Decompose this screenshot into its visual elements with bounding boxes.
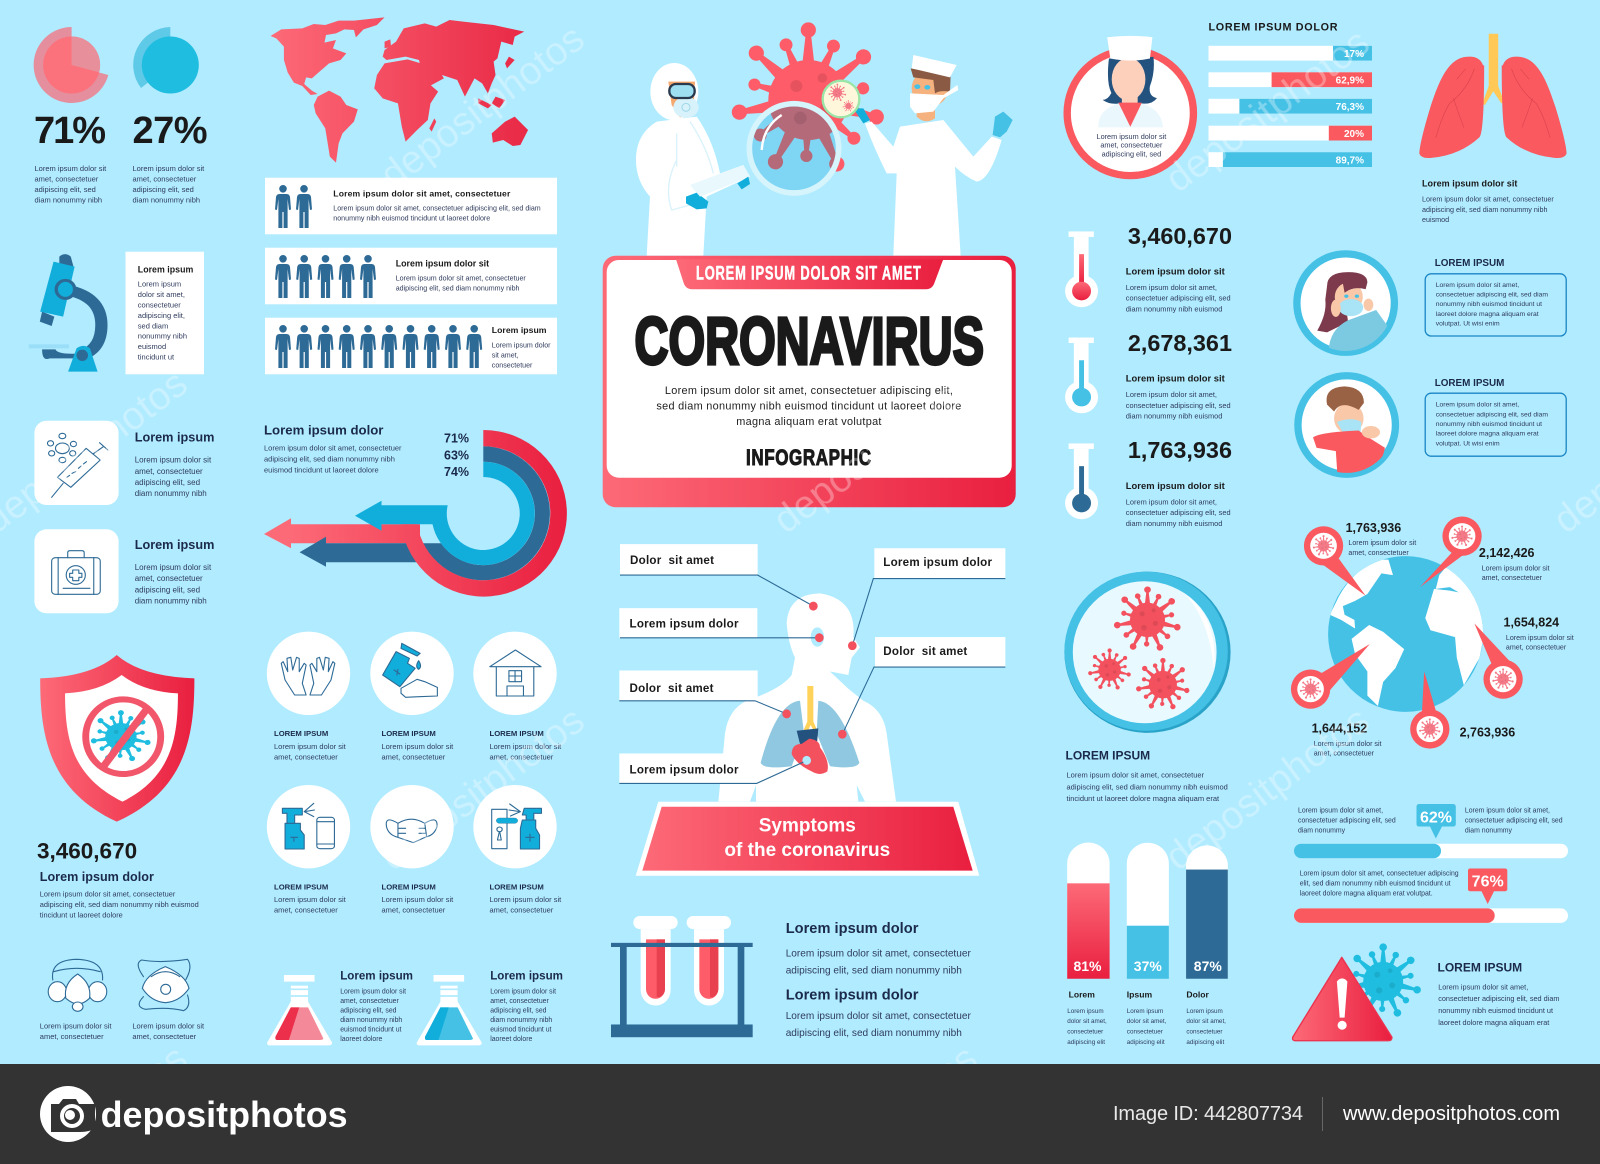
- caption row 2: amet, consectetuer: [274, 906, 338, 915]
- progress bar 76%: elit, sed diam nonummy nibh euismod tincidunt ut: [1300, 881, 1451, 888]
- flask: red: amet, consectetuer: [340, 998, 400, 1005]
- pie stat: 71%: 71%: [34, 110, 106, 152]
- arrow chart: adipiscing elit, sed diam nonummy nibh: [264, 454, 395, 464]
- test tube text: Lorem ipsum dolor sit amet, consectetuer: [786, 1011, 971, 1022]
- thermometer stat 2: 2,678,361: [1128, 330, 1232, 356]
- card: first aid kit: adipiscing elit, sed: [135, 585, 200, 594]
- panel: microscope text: nonummy nibh: [138, 332, 187, 341]
- symptoms banner: Symptoms: [759, 816, 856, 837]
- capsule bar chart: Ipsum: [1127, 990, 1152, 1000]
- caption row 2: Lorem ipsum dolor sit: [490, 895, 562, 904]
- card: vaccine syringe: amet, consectetuer: [135, 467, 203, 476]
- text box 1: Lorem ipsum dolor sit amet,: [1436, 282, 1519, 289]
- people panel: 5 people: Lorem ipsum dolor sit amet, consectetuer: [396, 275, 526, 283]
- card: first aid kit: amet, consectetuer: [135, 574, 203, 583]
- caption row 1: LOREM IPSUM: [490, 729, 544, 738]
- pie stat: 27%: diam nonummy nibh: [132, 196, 200, 204]
- caption row 1: amet, consectetuer: [490, 752, 554, 761]
- doctor in lab coat: [853, 55, 1013, 256]
- panel: microscope text: [126, 252, 204, 374]
- thermometer stat 2: Lorem ipsum dolor sit amet,: [1126, 390, 1217, 399]
- dark arrow and ring: [300, 446, 550, 580]
- bar chart: lorem ipsum dolor: [1208, 21, 1372, 167]
- capsule bar chart: dolor sit amet,: [1186, 1018, 1226, 1025]
- panel: microscope text: sed diam: [138, 321, 168, 330]
- ribbon: [676, 259, 943, 289]
- text box 2: volutpat. Ut wisi enim: [1436, 440, 1500, 447]
- nurse portrait: Lorem ipsum dolor sit: [1097, 132, 1166, 141]
- warning sign with virus: Lorem ipsum dolor sit amet,: [1438, 982, 1528, 991]
- petri dish with viruses: [1064, 572, 1231, 803]
- capsule bar chart: Lorem: [1069, 990, 1095, 1000]
- icon: lungs: Lorem ipsum dolor sit: [1422, 178, 1517, 188]
- arrow chart: [264, 422, 567, 597]
- flask: blue: amet, consectetuer: [490, 998, 550, 1005]
- nurse portrait: amet, consectetuer: [1100, 141, 1163, 150]
- text box 1: LOREM IPSUM: [1435, 258, 1504, 269]
- icon: lungs: [1419, 34, 1567, 224]
- pie stat: 27%: Lorem ipsum dolor sit: [132, 164, 205, 173]
- thermometer stat 2: consectetuer adipiscing elit, sed: [1126, 401, 1231, 410]
- symptom labels: Lorem ipsum dolor: [630, 763, 739, 776]
- scientist in hazmat suit: [636, 63, 750, 256]
- nurse portrait: adipiscing elit, sed: [1102, 150, 1161, 159]
- test tubes: [611, 916, 753, 1037]
- icon: spray on phone: [267, 785, 350, 868]
- petri dish with viruses: adipiscing elit, sed diam nonummy nibh euismod: [1066, 782, 1228, 791]
- card: first aid kit: [34, 529, 214, 613]
- test tube text: adipiscing elit, sed diam nonummy nibh: [786, 966, 962, 976]
- test tube text: Lorem ipsum dolor: [786, 921, 919, 937]
- icon: shield with crossed virus: [40, 655, 194, 822]
- shield stat text: Lorem ipsum dolor: [40, 870, 154, 884]
- icons: respirator masks with text: Lorem ipsum dolor sit: [132, 1022, 205, 1031]
- subtitle: INFOGRAPHIC: [746, 445, 872, 470]
- caption row 2: amet, consectetuer: [490, 906, 554, 915]
- symptoms banner: [636, 802, 979, 876]
- symptoms diagram: [619, 544, 1005, 876]
- panel: microscope text: euismod: [138, 342, 166, 351]
- watermark: depositphotos: [373, 699, 592, 879]
- petri dish with viruses: LOREM IPSUM: [1066, 748, 1150, 762]
- panel: microscope text: Lorem ipsum: [138, 280, 181, 289]
- caption row 2: Lorem ipsum dolor sit: [274, 895, 347, 904]
- progress bar 76%: Lorem ipsum dolor sit amet, consectetuer adipiscing: [1300, 871, 1459, 878]
- globe with pins: Lorem ipsum dolor sit: [1482, 564, 1550, 572]
- globe with pins: 1,763,936: [1346, 521, 1401, 535]
- arrow chart: euismod tincidunt ut laoreet dolore: [264, 465, 379, 474]
- thermometer stat 1: Lorem ipsum dolor sit amet,: [1126, 283, 1217, 292]
- petri dish with viruses: Lorem ipsum dolor sit amet, consectetuer: [1066, 771, 1205, 780]
- magnifying glass: [690, 100, 842, 197]
- caption row 1: LOREM IPSUM: [382, 729, 436, 738]
- petri sample lens: [823, 81, 859, 117]
- capsule bar chart: Dolor: [1186, 990, 1209, 1000]
- capsule bar chart: dolor sit amet,: [1127, 1018, 1167, 1025]
- globe with pins: Lorem ipsum dolor sit: [1348, 539, 1416, 547]
- icon: camera logo: [40, 1086, 96, 1142]
- ribbon: LOREM IPSUM DOLOR SIT AMET: [696, 263, 922, 284]
- people panel: 5 people: [265, 248, 557, 304]
- icon: lungs: euismod: [1422, 215, 1449, 224]
- text box 1: volutpat. Ut wisi enim: [1436, 320, 1500, 328]
- thermometer stat 1: consectetuer adipiscing elit, sed: [1126, 294, 1231, 303]
- symptom labels: Lorem ipsum dolor: [883, 556, 992, 569]
- pie stat: 27%: amet, consectetuer: [132, 174, 197, 184]
- symptom labels: [619, 544, 1005, 783]
- flask: blue: laoreet dolore: [490, 1036, 533, 1043]
- arrow chart: 71%: [444, 432, 469, 446]
- text box 1: consectetuer adipiscing elit, sed diam: [1436, 292, 1548, 299]
- thermometer stat 1: 3,460,670: [1128, 223, 1232, 249]
- red arrow shaft: [264, 518, 420, 548]
- thermometer stat 3: diam nonummy nibh euismod: [1126, 519, 1222, 528]
- bar chart: lorem ipsum dolor: LOREM IPSUM DOLOR: [1208, 21, 1338, 33]
- people panel: 10 people: consectetuer: [492, 362, 533, 370]
- people panel: 10 people: Lorem ipsum dolor: [492, 342, 551, 350]
- people panel: 10 people: sit amet,: [492, 352, 519, 360]
- flask: blue: Lorem ipsum: [490, 969, 563, 982]
- arrow chart: 63%: [444, 448, 469, 462]
- flask: red: Lorem ipsum dolor sit: [340, 988, 406, 995]
- shield stat text: tincidunt ut laoreet dolore: [40, 911, 123, 920]
- icons: respirator masks with text: [40, 959, 205, 1041]
- watermark: depositphotos: [373, 17, 592, 197]
- globe with pins: 2,763,936: [1460, 725, 1515, 739]
- text box 2: nonummy nibh euismod tincidunt ut: [1436, 421, 1542, 428]
- card: first aid kit: Lorem ipsum: [135, 538, 214, 552]
- globe with pins: amet, consectetuer: [1314, 750, 1375, 758]
- caption row 2: LOREM IPSUM: [382, 882, 436, 891]
- pie stat: 71%: Lorem ipsum dolor sit: [34, 164, 107, 173]
- globe with pins: 1,654,824: [1504, 616, 1559, 630]
- portrait: man coughing into elbow: [1298, 376, 1395, 477]
- pie stat: 71%: diam nonummy nibh: [34, 196, 102, 204]
- thermometer stat 1: Lorem ipsum dolor sit: [1126, 266, 1225, 276]
- shield stat text: [37, 838, 199, 920]
- capsule bar chart: Lorem ipsum: [1127, 1008, 1163, 1015]
- thermometer stat 2: diam nonummy nibh euismod: [1126, 412, 1222, 421]
- progress bar 62%: consectetuer adipiscing elit, sed: [1298, 818, 1396, 825]
- card: vaccine syringe: [34, 421, 214, 505]
- people panel: 5 people: Lorem ipsum dolor sit: [396, 258, 489, 268]
- capsule bar chart: consectetuer: [1067, 1028, 1103, 1036]
- progress bar 62%: 62%: [1420, 809, 1452, 826]
- warning sign with virus: LOREM IPSUM: [1438, 960, 1522, 974]
- watermark: depositphotos: [766, 362, 985, 542]
- footer bar: www.depositphotos.com: [1342, 1103, 1560, 1125]
- thermometer stat 1: diam nonummy nibh euismod: [1126, 304, 1222, 313]
- intro text: Lorem ipsum dolor sit amet, consectetuer adipiscing elit,: [665, 385, 953, 397]
- people panel: 5 people: adipiscing elit, sed diam nonummy nibh: [396, 285, 520, 293]
- text box 2: laoreet dolore magna aliquam erat: [1436, 431, 1539, 438]
- test tube text: adipiscing elit, sed diam nonummy nibh: [786, 1028, 962, 1039]
- people panel: 10 people: Lorem ipsum: [492, 325, 547, 335]
- footer bar: [0, 1064, 1600, 1164]
- caption row 2: LOREM IPSUM: [490, 882, 544, 891]
- thermometer stat 3: 1,763,936: [1128, 437, 1232, 463]
- icon: face mask: [370, 785, 454, 868]
- icons: respirator masks with text: amet, consectetuer: [40, 1032, 104, 1041]
- card: first aid kit: Lorem ipsum dolor sit: [135, 563, 212, 572]
- flask: red: euismod tincidunt ut: [340, 1026, 402, 1034]
- capsule bar chart: consectetuer: [1127, 1028, 1163, 1036]
- intro text: magna aliquam erat volutpat: [736, 416, 882, 428]
- body silhouette: [718, 593, 896, 802]
- flask: blue: diam nonummy nibh: [490, 1017, 552, 1024]
- globe with pins: 1,644,152: [1312, 722, 1367, 736]
- bar chart: lorem ipsum dolor: 76,3%: [1336, 102, 1364, 113]
- icon: gloves: [267, 632, 350, 715]
- pie stat: 27%: adipiscing elit, sed: [132, 185, 194, 194]
- arrow chart: Lorem ipsum dolor: [264, 422, 383, 437]
- hero illustration: scientists and virus: [636, 22, 1013, 256]
- test tube text: [786, 921, 971, 1039]
- capsule bar chart: adipiscing elit: [1186, 1039, 1224, 1046]
- shield stat text: 3,460,670: [37, 838, 137, 863]
- shield stat text: adipiscing elit, sed diam nonummy nibh euismod: [40, 900, 199, 909]
- progress bar 62%: diam nonummy: [1465, 828, 1513, 835]
- globe with pins: amet, consectetuer: [1506, 644, 1567, 652]
- card: vaccine syringe: adipiscing elit, sed: [135, 478, 200, 487]
- progress bar 62%: consectetuer adipiscing elit, sed: [1465, 818, 1563, 825]
- progress bar 62%: Lorem ipsum dolor sit amet,: [1298, 808, 1383, 815]
- shield stat text: Lorem ipsum dolor sit amet, consectetuer: [40, 890, 176, 899]
- flask: blue: Lorem ipsum dolor sit: [490, 988, 556, 995]
- progress bar 76%: [1294, 868, 1568, 923]
- panel: microscope text: dolor sit amet,: [138, 290, 185, 299]
- warning sign with virus: laoreet dolore magna aliquam erat: [1438, 1018, 1549, 1027]
- icon: stay at home: [473, 632, 557, 715]
- capsule bar chart: Lorem ipsum: [1186, 1008, 1223, 1015]
- progress bar 62%: [1294, 804, 1568, 858]
- thermometer stat 2: [1065, 330, 1232, 421]
- icon grid: protection measures: [267, 632, 562, 915]
- flask: red: diam nonummy nibh: [340, 1017, 402, 1024]
- thermometer stat 3: consectetuer adipiscing elit, sed: [1126, 508, 1231, 517]
- caption row 1: LOREM IPSUM: [274, 729, 328, 738]
- warning sign with virus: [1293, 943, 1559, 1041]
- thermometer stat 3: Lorem ipsum dolor sit: [1126, 480, 1225, 491]
- progress bar 62%: diam nonummy: [1298, 828, 1346, 835]
- icon: hand sanitizer: [370, 632, 454, 715]
- bar chart: lorem ipsum dolor: 62,9%: [1336, 76, 1364, 86]
- pie stat: 71%: adipiscing elit, sed: [34, 185, 96, 194]
- petri dish with viruses: tincidunt ut laoreet dolore magna aliquam erat: [1066, 794, 1220, 803]
- symptom labels: Dolor sit amet: [883, 645, 967, 658]
- footer bar: Image ID: 442807734: [1113, 1103, 1303, 1125]
- intro text: sed diam nonummy nibh euismod tincidunt ut laoreet dolore: [656, 401, 962, 413]
- caption row 1: [274, 729, 562, 761]
- panel: microscope text: Lorem ipsum: [138, 265, 193, 275]
- capsule bar chart: adipiscing elit: [1127, 1039, 1165, 1046]
- capsule bar chart: Lorem ipsum: [1067, 1008, 1104, 1015]
- panel: microscope text: adipiscing elit,: [138, 311, 185, 320]
- globe with pins: [1291, 517, 1574, 758]
- pie stat: 27%: 27%: [132, 110, 208, 152]
- thermometer stat 3: [1065, 437, 1232, 528]
- symptom labels: Dolor sit amet: [630, 682, 714, 695]
- people panel: 2 people: Lorem ipsum dolor sit amet, consectetuer: [333, 188, 511, 198]
- caption row 2: amet, consectetuer: [382, 906, 446, 915]
- caption row 1: Lorem ipsum dolor sit: [382, 742, 454, 751]
- bar chart: lorem ipsum dolor: 20%: [1344, 129, 1364, 140]
- symptoms banner: of the coronavirus: [724, 840, 890, 861]
- capsule bar chart: consectetuer: [1186, 1028, 1222, 1036]
- card: vaccine syringe: Lorem ipsum: [135, 431, 214, 445]
- caption row 1: Lorem ipsum dolor sit: [490, 742, 562, 751]
- arrow chart: 74%: [444, 465, 469, 479]
- flask: blue: adipiscing elit, sed: [490, 1007, 547, 1014]
- capsule bar chart: 81%: [1073, 958, 1102, 974]
- text box 2: LOREM IPSUM: [1435, 378, 1504, 389]
- caption row 1: amet, consectetuer: [382, 752, 446, 761]
- globe with pins: 2,142,426: [1479, 546, 1535, 560]
- capsule bar chart: [1067, 843, 1228, 1046]
- text box 2: consectetuer adipiscing elit, sed diam: [1436, 411, 1548, 418]
- flask: red: laoreet dolore: [340, 1036, 383, 1043]
- capsule bar chart: 37%: [1134, 958, 1162, 974]
- text box 1: [1425, 258, 1566, 336]
- red ring: [401, 430, 567, 597]
- globe with pins: amet, consectetuer: [1348, 549, 1409, 557]
- people panel: 2 people: Lorem ipsum dolor sit amet, consectetuer adipiscing elit, sed diam: [333, 205, 541, 213]
- caption row 1: amet, consectetuer: [274, 752, 338, 761]
- bar chart: lorem ipsum dolor: 17%: [1344, 49, 1364, 60]
- watermark: depositphotos: [1158, 699, 1377, 879]
- people panel: 2 people: [265, 178, 557, 234]
- flask: blue: euismod tincidunt ut: [490, 1026, 552, 1034]
- caption row 2: Lorem ipsum dolor sit: [382, 895, 454, 904]
- test tube text: Lorem ipsum dolor: [786, 988, 919, 1004]
- progress bar 76%: 76%: [1472, 874, 1504, 891]
- thermometer stat 1: [1065, 223, 1232, 313]
- pie stat: 71%: [34, 27, 108, 204]
- people panel: 10 people: [265, 318, 557, 374]
- main title: CORONAVIRUS: [634, 304, 984, 379]
- card: first aid kit: diam nonummy nibh: [135, 597, 207, 606]
- icon: lungs: Lorem ipsum dolor sit amet, consectetuer: [1422, 194, 1554, 204]
- thermometer stat 3: Lorem ipsum dolor sit amet,: [1126, 497, 1217, 506]
- card: vaccine syringe: Lorem ipsum dolor sit: [135, 456, 212, 465]
- symptom labels: Dolor sit amet: [630, 554, 714, 567]
- portrait: woman putting on mask: [1297, 254, 1394, 356]
- capsule bar chart: dolor sit amet,: [1067, 1018, 1107, 1025]
- caption row 2: LOREM IPSUM: [274, 882, 328, 891]
- title card: [603, 256, 1016, 507]
- test tube text: Lorem ipsum dolor sit amet, consectetuer: [786, 948, 971, 959]
- icon: microscope: [29, 254, 101, 372]
- pie stat: 71%: amet, consectetuer: [34, 174, 99, 184]
- globe with pins: Lorem ipsum dolor sit: [1314, 740, 1382, 748]
- progress bar 76%: laoreet dolore magna aliquam erat volutpat.: [1300, 891, 1433, 898]
- watermark: depositphotos: [1158, 21, 1377, 201]
- thermometer stat 2: Lorem ipsum dolor sit: [1126, 373, 1225, 384]
- people panel: 2 people: nonummy nibh euismod tincidunt ut laoreet dolore: [333, 215, 490, 223]
- warning sign with virus: nonummy nibh euismod tincidunt ut: [1438, 1006, 1553, 1015]
- capsule bar chart: 87%: [1194, 958, 1222, 974]
- text box 2: [1425, 378, 1566, 456]
- warning sign with virus: consectetuer adipiscing elit, sed diam: [1438, 994, 1559, 1003]
- flask: red: adipiscing elit, sed: [340, 1007, 397, 1014]
- globe with pins: Lorem ipsum dolor sit: [1506, 634, 1574, 642]
- text box 1: laoreet dolore magna aliquam erat: [1436, 311, 1539, 318]
- flask: blue: [417, 969, 563, 1045]
- arrow chart: Lorem ipsum dolor sit amet, consectetuer: [264, 444, 402, 453]
- cyan arrow and ring: [355, 462, 535, 565]
- caption row 1: Lorem ipsum dolor sit: [274, 742, 347, 751]
- flask: red: Lorem ipsum: [340, 969, 413, 982]
- icons: respirator masks with text: amet, consectetuer: [132, 1032, 197, 1041]
- bar chart: lorem ipsum dolor: 89,7%: [1336, 156, 1364, 167]
- pie stat: 27%: [132, 27, 208, 204]
- nurse portrait: [1067, 36, 1193, 176]
- capsule bar chart: adipiscing elit: [1067, 1039, 1105, 1046]
- text box 1: nonummy nibh euismod tincidunt ut: [1436, 301, 1542, 308]
- big virus: [731, 22, 885, 174]
- panel: microscope text: consectetuer: [138, 300, 181, 310]
- icon: spray on door handle: [473, 785, 557, 868]
- flask: red: [267, 969, 413, 1045]
- globe with pins: amet, consectetuer: [1482, 574, 1543, 582]
- card: vaccine syringe: diam nonummy nibh: [135, 489, 207, 498]
- icons: respirator masks with text: Lorem ipsum dolor sit: [40, 1022, 112, 1031]
- world map: [271, 17, 528, 163]
- symptom labels: Lorem ipsum dolor: [630, 617, 739, 630]
- panel: microscope text: tincidunt ut: [138, 352, 175, 362]
- text box 2: Lorem ipsum dolor sit amet,: [1436, 402, 1519, 409]
- progress bar 62%: Lorem ipsum dolor sit amet,: [1465, 808, 1550, 815]
- caption row 2: [274, 882, 562, 915]
- footer bar: depositphotos: [101, 1094, 348, 1135]
- icon: lungs: adipiscing elit, sed diam nonummy nibh: [1422, 205, 1547, 214]
